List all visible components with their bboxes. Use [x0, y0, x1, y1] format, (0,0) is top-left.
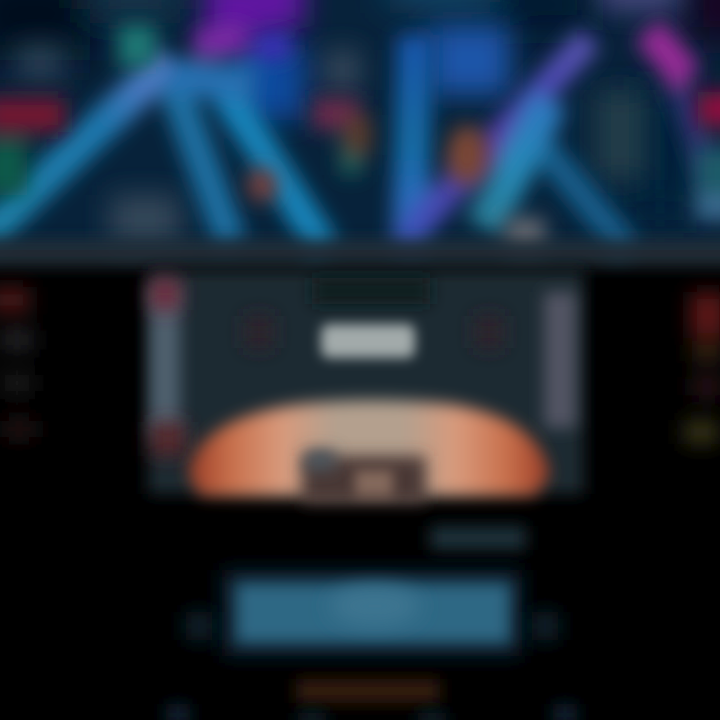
light beams [0, 30, 715, 250]
small teal caption [430, 526, 526, 550]
footer text bar [296, 679, 440, 703]
title label [321, 324, 415, 358]
header band [0, 240, 720, 266]
side list: right [684, 292, 720, 444]
arena centre detail [302, 456, 426, 504]
hero: concert light beams [0, 0, 720, 252]
footer small marks [166, 704, 577, 720]
panel accents [246, 316, 272, 348]
purple wash [205, 0, 305, 50]
right column marker [544, 292, 576, 428]
left column marker [150, 285, 180, 435]
crowd colour spots [0, 25, 720, 252]
panel: central stage graphic [148, 270, 584, 504]
call to action button [186, 570, 558, 656]
arena arc [188, 400, 550, 496]
top centre dark notch [312, 278, 430, 304]
stage lights and blue wash [15, 0, 680, 245]
side list: left [0, 287, 36, 438]
